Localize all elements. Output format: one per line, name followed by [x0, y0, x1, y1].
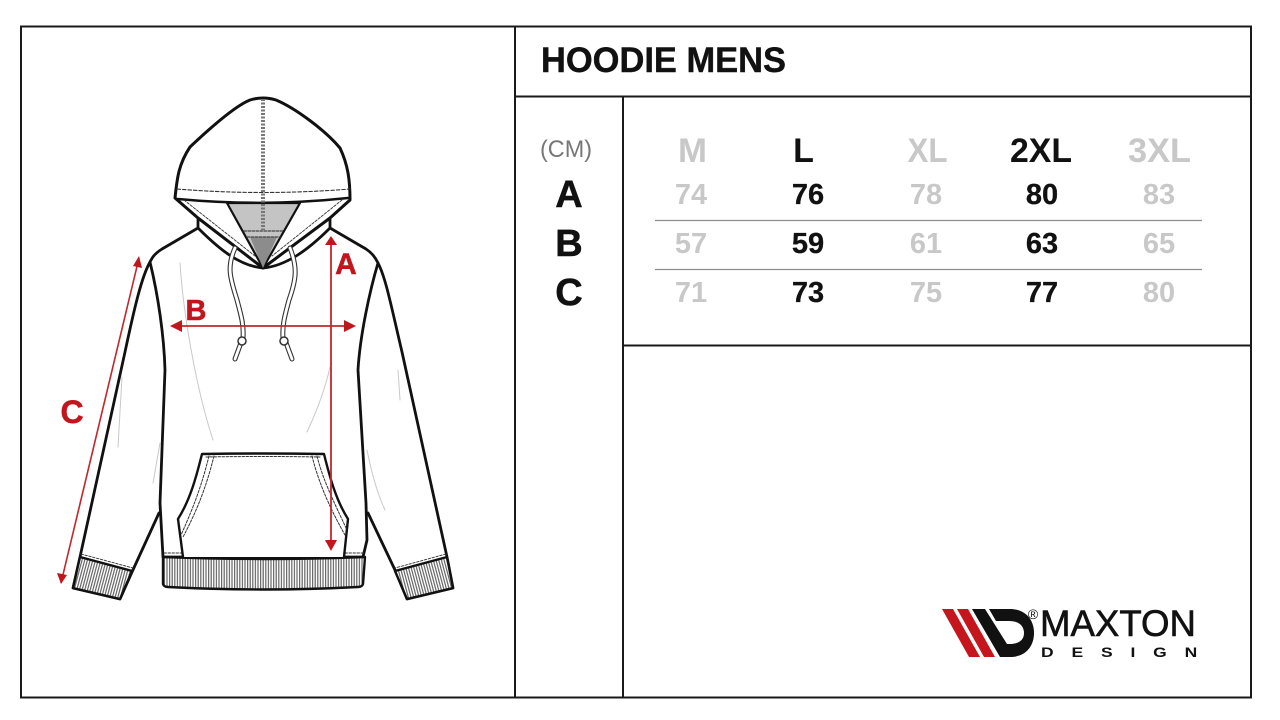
body — [150, 228, 378, 557]
logo subline: DESIGN — [1041, 646, 1197, 661]
row labels: B — [555, 223, 583, 265]
logo: Maxton Design — [942, 603, 1197, 661]
row C values: 77 — [1026, 277, 1058, 309]
row labels — [555, 174, 583, 314]
illustration: hoodie flat sketch — [73, 98, 453, 599]
measurement B — [170, 295, 356, 332]
row labels: C — [555, 272, 583, 314]
row A values — [675, 179, 1175, 211]
logo wordmark: MAXTON — [1040, 603, 1196, 644]
hood dome — [175, 98, 350, 268]
left drawstring — [230, 248, 246, 359]
brim stitching — [177, 189, 350, 192]
row A values: 78 — [910, 179, 942, 211]
row C values: 71 — [675, 277, 707, 309]
title: HOODIE MENS — [541, 41, 786, 80]
size headers: M — [678, 132, 707, 170]
size headers: L — [793, 132, 814, 170]
waist rib hem — [163, 557, 365, 590]
size headers: 3XL — [1128, 132, 1191, 170]
measurement C: C — [60, 394, 84, 430]
measurement B: B — [186, 295, 206, 327]
left cuff — [73, 557, 132, 599]
row B values: 65 — [1143, 228, 1175, 260]
hood opening stitching — [244, 231, 283, 237]
measurement A: A — [335, 248, 357, 281]
fabric fold lines — [118, 263, 400, 510]
row C values: 73 — [792, 277, 824, 309]
hood inner stitching — [184, 200, 342, 256]
row B values: 63 — [1026, 228, 1058, 260]
size headers: XL — [908, 132, 948, 170]
pocket stitching — [181, 456, 347, 537]
right sleeve — [368, 263, 453, 599]
size headers — [678, 132, 1191, 170]
row C values: 80 — [1143, 277, 1175, 309]
kangaroo pocket — [178, 454, 348, 557]
left sleeve — [73, 262, 159, 599]
hood brim edge — [178, 198, 348, 203]
logo mark — [942, 609, 1034, 657]
right cuff — [395, 557, 453, 599]
registered mark: ® — [1028, 606, 1039, 622]
cuff and hem stitching — [81, 553, 446, 568]
row A values: 80 — [1026, 179, 1058, 211]
measurement A — [325, 236, 357, 551]
row C values: 75 — [910, 277, 942, 309]
row labels: A — [555, 174, 583, 216]
row A values: 74 — [675, 179, 707, 211]
row B values: 59 — [792, 228, 824, 260]
hood centre seam — [261, 99, 265, 230]
row B values — [675, 228, 1175, 260]
table rows — [675, 179, 1175, 309]
row A values: 83 — [1143, 179, 1175, 211]
hood opening light grey — [227, 203, 300, 268]
right drawstring — [280, 248, 295, 359]
measurement C — [57, 256, 142, 584]
unit label: (CM) — [540, 136, 592, 163]
hood front panel and collar — [198, 190, 330, 268]
size headers: 2XL — [1010, 132, 1072, 170]
row C values — [675, 277, 1175, 309]
hood opening dark grey — [250, 237, 277, 268]
row B values: 61 — [910, 228, 942, 260]
row B values: 57 — [675, 228, 707, 260]
row A values: 76 — [792, 179, 824, 211]
